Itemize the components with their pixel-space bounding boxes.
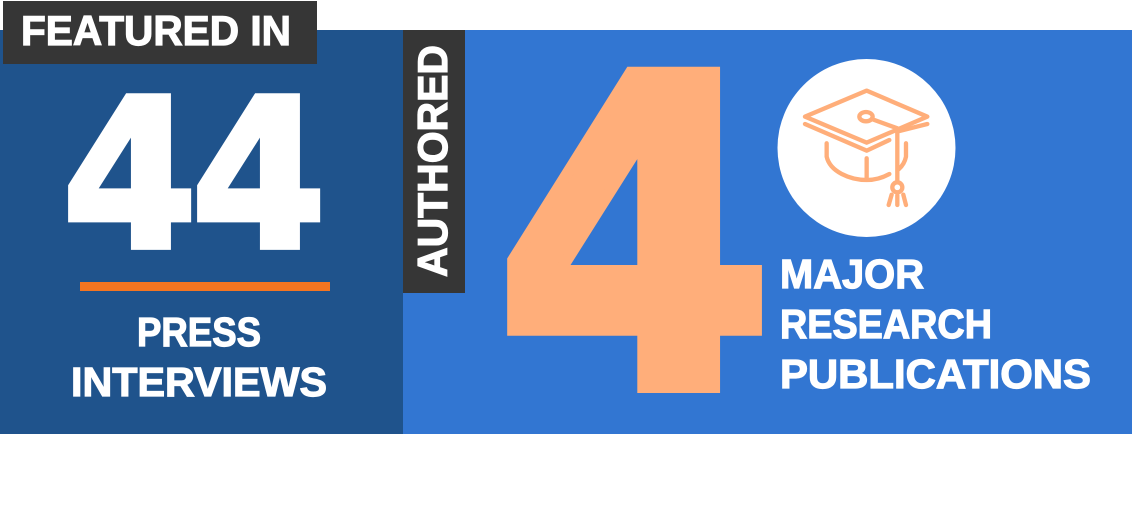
heading: authored: AUTHORED — [409, 45, 456, 277]
number: 44: 4 — [62, 56, 197, 296]
panel: authored — [403, 0, 1132, 489]
label: major research publications: MAJOR — [780, 251, 924, 297]
number: 44 — [62, 56, 326, 296]
heading: authored — [403, 30, 465, 293]
number: 44: 4 — [191, 56, 326, 296]
label: press interviews: PRESS — [137, 309, 261, 355]
label: major research publications: RESEARCH — [780, 301, 992, 347]
panel: featured in — [0, 1, 403, 434]
icon: graduation cap — [778, 59, 956, 237]
heading: featured in: FEATURED IN — [21, 7, 291, 54]
divider: orange rule — [80, 282, 330, 291]
label: press interviews — [71, 309, 327, 405]
number: 4: 4 — [495, 0, 775, 489]
label: major research publications: PUBLICATIONS — [780, 351, 1091, 397]
label: press interviews: INTERVIEWS — [71, 359, 327, 405]
heading: featured in — [3, 1, 317, 64]
label: major research publications — [780, 251, 1091, 397]
